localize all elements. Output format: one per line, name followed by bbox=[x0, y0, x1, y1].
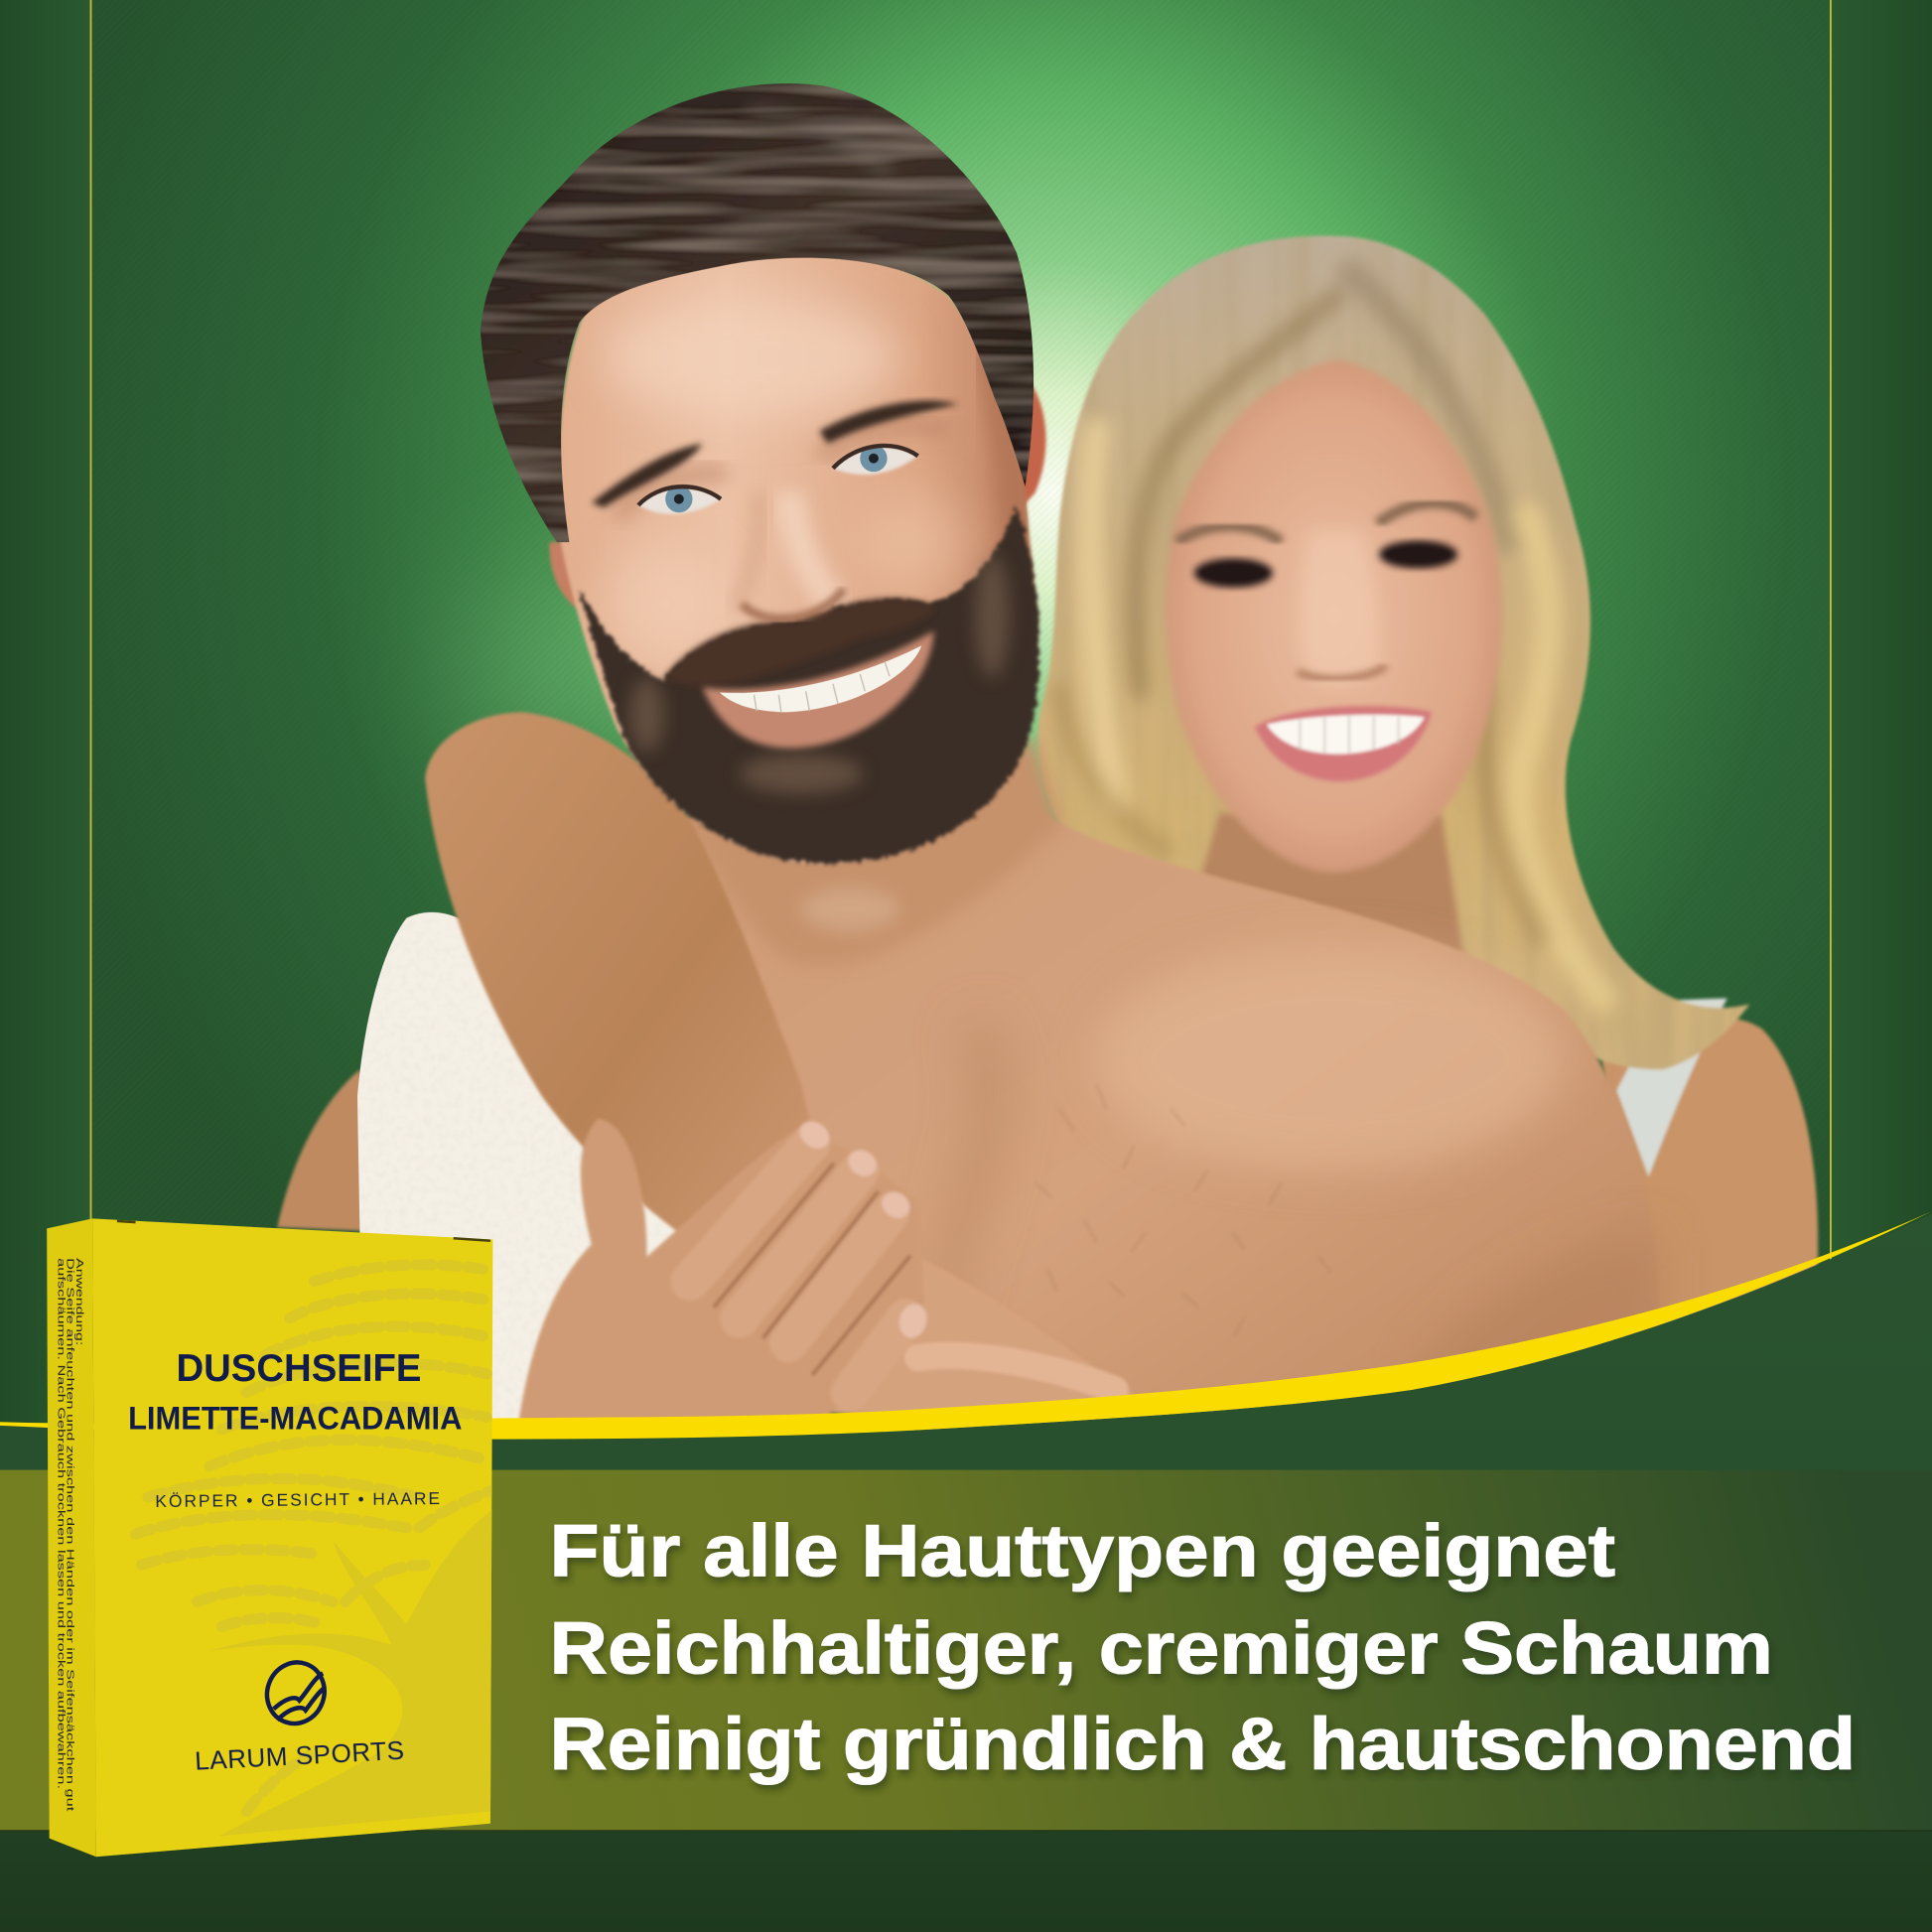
box: front face bbox=[92, 1218, 492, 1857]
man: teeth lines bbox=[755, 661, 890, 712]
woman: hair bbox=[1037, 235, 1749, 1069]
box: logo bbox=[258, 1654, 333, 1731]
photo: smiling couple bbox=[277, 83, 1818, 1453]
woman bbox=[277, 235, 1818, 1355]
olive text band bbox=[0, 1470, 1932, 1831]
woman: arm wrapped around man bbox=[425, 712, 826, 1282]
box: side text: aufschäumen. Nach Gebrauch trocknen lassen und trocken aufbewahren. bbox=[55, 1258, 67, 1789]
man: face bbox=[559, 249, 1036, 864]
man: chest hair bbox=[1035, 1084, 1330, 1335]
box: brand: LARUM SPORTS bbox=[194, 1735, 405, 1776]
product box bbox=[47, 1218, 492, 1857]
man: neck highlight bbox=[801, 888, 899, 931]
man: teeth bbox=[720, 645, 921, 712]
hands on arm bbox=[517, 1116, 1140, 1430]
man: beard highlight bbox=[629, 554, 1009, 793]
woman: brows, eyes, nose, mouth bbox=[1176, 502, 1476, 781]
fingers bbox=[690, 1144, 905, 1392]
box: side text: Die Seife anfeuchten und zwischen den Händen oder im Seifensäckchen gut bbox=[65, 1258, 76, 1811]
man: brows bbox=[592, 444, 702, 507]
man: face shading bbox=[604, 296, 1018, 665]
woman: right shoulder and arm bbox=[1601, 1018, 1818, 1355]
man: torso bbox=[684, 786, 1658, 1453]
yellow swoosh bbox=[0, 1211, 1932, 1440]
woman: back arm bbox=[277, 1069, 394, 1232]
towel bbox=[357, 912, 690, 1430]
line 2: Reichhaltiger, cremiger Schaum bbox=[550, 1606, 1773, 1689]
benefit text bbox=[550, 1509, 1856, 1785]
box: tree watermark bbox=[136, 1265, 492, 1836]
man: head bbox=[481, 83, 1045, 864]
box: title: DUSCHSEIFE bbox=[176, 1347, 421, 1390]
back hand bbox=[813, 1257, 1140, 1430]
woman: neck bbox=[1182, 813, 1466, 973]
box: side text bbox=[55, 1258, 85, 1811]
man: lips bbox=[702, 630, 934, 749]
lower fingers bbox=[918, 1355, 1115, 1390]
tree: foliage bbox=[136, 1265, 490, 1811]
man: beard bbox=[579, 505, 1039, 863]
man: torso shading bbox=[936, 949, 1658, 1453]
man: eyes bbox=[638, 487, 721, 514]
line 1: Für alle Hauttypen geeignet bbox=[550, 1509, 1615, 1591]
woman: hair strands bbox=[1059, 271, 1601, 998]
box: variant: LIMETTE-MACADAMIA bbox=[128, 1401, 462, 1437]
tree: trunk and branches bbox=[209, 1509, 492, 1836]
man: nose bbox=[742, 589, 844, 619]
box: side text: Anwendung: bbox=[73, 1258, 85, 1345]
fingernails bbox=[794, 1116, 930, 1341]
box: top flap marks bbox=[117, 1221, 490, 1241]
box: uses: KÖRPER • GESICHT • HAARE bbox=[155, 1488, 440, 1511]
man: hair bbox=[481, 83, 1034, 542]
man: mustache bbox=[663, 599, 934, 688]
lower ground panel bbox=[0, 1213, 1932, 1932]
man: hair highlight bbox=[752, 111, 888, 173]
front hand bbox=[517, 1119, 924, 1430]
woman: top strap bbox=[1616, 998, 1727, 1176]
man: neck bbox=[684, 740, 1062, 966]
box: side face bbox=[47, 1218, 96, 1857]
man: ears bbox=[1013, 376, 1045, 517]
line 3: Reinigt gründlich & hautschonend bbox=[550, 1703, 1856, 1785]
woman: face bbox=[1166, 359, 1502, 873]
